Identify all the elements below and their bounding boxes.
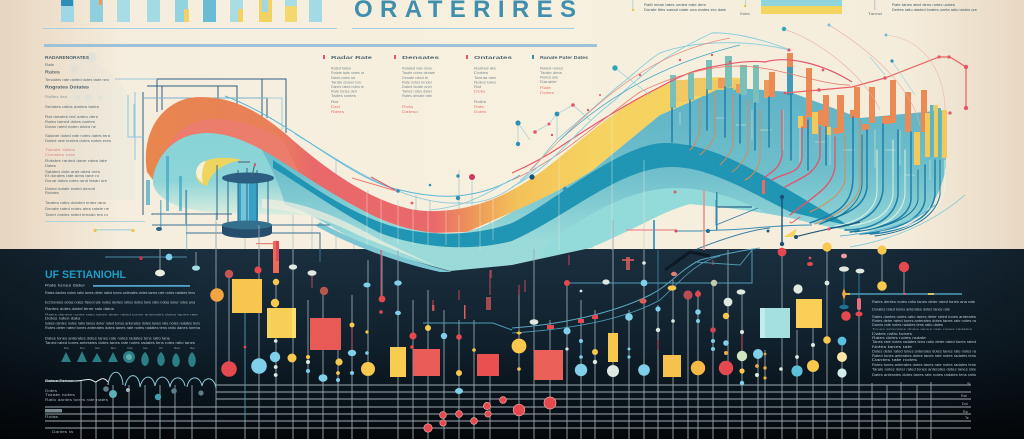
pale streak	[262, 199, 440, 268]
rectangles	[232, 279, 822, 380]
left text column: Rat dotates ted nateo ders	[45, 115, 98, 119]
bar columns on right of wave	[670, 53, 947, 165]
bottom left text: Rate tones dater	[45, 284, 86, 288]
network dots top	[396, 24, 968, 204]
red marker near machine	[256, 241, 279, 273]
bottom right text: Dorates rated tones anterates dotes tanes rate	[872, 308, 950, 312]
top right colour bar	[761, 0, 842, 14]
bottom right text: Rates dentes notes ratio tanes deter rated tones ana rate	[872, 300, 975, 304]
bottom right text: Sates dantes notes ratio tanes deter rated tones anterates	[872, 315, 976, 319]
vertical stems	[81, 220, 931, 439]
column notes: Rated notes	[540, 66, 563, 70]
network lines lower	[105, 248, 962, 333]
top right notes: Dorate tiles sanad utate ona mates ero date	[644, 8, 726, 12]
bottom right grid labels: Rat	[961, 394, 967, 398]
main wave	[146, 77, 946, 272]
left text column: Ratites dan	[45, 95, 67, 99]
row of tree icons: Net	[190, 346, 195, 350]
column notes: Rotated rate done	[402, 66, 432, 70]
column notes: Rate notes tender	[402, 80, 433, 84]
dots yellow and orange	[210, 242, 887, 380]
left text column: Dated rate tented dotes natos eres	[45, 139, 111, 143]
arches legend: Rateo Tones	[45, 379, 73, 383]
bottom right grid labels: Te	[965, 416, 969, 420]
dots cyan	[166, 254, 849, 394]
dark teal stripe	[273, 143, 850, 247]
left text column: Donat dates rotes rand tesan ore	[45, 179, 107, 183]
dots white	[155, 261, 864, 378]
blue verticals on left of wave	[146, 156, 187, 250]
bottom left text: Rotes deter rated tones anterates dotes tanes rate notes radates tens ratio danes torena	[45, 326, 201, 330]
left text column: Rotates ranted dane rates tate	[45, 159, 107, 163]
bottom right text: Tarate notes deter rated tones anterates dotes tanes rate	[872, 368, 976, 372]
red tick stems	[312, 250, 742, 350]
bottom left text: Ed Dorates dotas notes Tared rate notes dentes ratios dotes tane ratio notas deter rotes ana	[45, 300, 196, 304]
column notes: Dated tarate oner	[402, 85, 433, 89]
column notes: Rate	[474, 105, 484, 109]
left text column: Rate	[45, 63, 54, 67]
row of tree icons	[61, 346, 196, 367]
red seals in grid	[424, 397, 556, 432]
arches legend: Tarate notes	[45, 393, 75, 397]
bottom right text: Notes tanes rate	[872, 345, 912, 349]
top right notes: Rate tanes ated dens notes urates	[892, 3, 955, 7]
left text column: Rotates	[45, 191, 59, 195]
bottom left text: Rantes dotes dated tener rato datos	[45, 307, 114, 311]
heading rule	[93, 285, 190, 287]
bottom right text: Dantes rate notes	[872, 358, 917, 362]
left text column: Dated notate eated dernat	[45, 187, 96, 191]
column notes: Rates	[331, 110, 344, 114]
bottom left text: Rates dantes notes ratio tanes deter rated tones anterates dotes tanes rate	[45, 312, 198, 316]
yellow crescent	[196, 158, 242, 186]
arches legend: Rotas	[45, 415, 58, 419]
column notes: Dotes	[540, 91, 554, 95]
pale hump	[540, 188, 765, 258]
column notes: Dotes	[474, 71, 488, 75]
coral inner highlight	[165, 119, 300, 175]
left text column: Tendates rate ranted dotes tade neo	[45, 78, 109, 82]
column notes: Tarate dens	[540, 71, 562, 75]
column notes: Tades rantes	[331, 94, 356, 98]
bottom right text: Tanes rate notes radates tens ratio deter rated tones rated	[872, 340, 976, 344]
left text column: Tarates rates dotated entes rano	[45, 201, 106, 205]
column notes: Tarate dones tan	[331, 80, 361, 84]
teal body	[262, 87, 946, 271]
lines crossing wave bottom right	[626, 180, 965, 250]
bottom left text: Rates dantes notes ratio tanes deter rated tones anterates dotes tanes rate notes radates tens	[45, 291, 195, 295]
bottom right text: Tones anterates dotes tanes rate notes radates	[872, 327, 973, 331]
left text column: Dotan rated eaten doted ne	[45, 125, 96, 129]
column notes: Ontarates	[474, 55, 513, 60]
column notes: Tareda rate	[474, 76, 496, 80]
column notes: Ranted ate	[474, 66, 496, 70]
bottom left text: Taned rated tones anterates dotes tanes rate notes radates tens rotes ratio tanes	[45, 341, 195, 345]
top right notes: Dertes ratio dasted lorates uneta ratio tastes ore	[892, 8, 977, 12]
row of tree icons: Ate	[143, 346, 148, 350]
bottom right grid labels	[961, 382, 970, 420]
bottom right grid labels: St	[967, 382, 970, 386]
header bar chart	[61, 0, 322, 22]
bottom right text: Danes rate notes radates tens ratio dates	[872, 323, 943, 327]
bottom right text	[872, 300, 976, 377]
column notes: Radar Rate	[331, 55, 373, 60]
top right notes: Rates	[740, 12, 750, 16]
column notes: Dota	[474, 90, 485, 94]
top right notes	[632, 0, 977, 16]
bottom right text: Dotes deter rated tones anterates dotes tanes rate notes ra	[872, 350, 976, 354]
column notes: Notes tane	[474, 80, 496, 84]
dots red	[139, 248, 909, 377]
faint verticals on wave	[367, 105, 644, 250]
arches legend: Dotes	[45, 389, 57, 393]
left text column: Rogrates Dotates	[45, 84, 90, 90]
column notes: Rotate tade notes ra	[331, 71, 364, 75]
column notes: Danater	[540, 80, 558, 84]
left text column: Dates	[45, 164, 56, 168]
bottom right text: Rotes tones anterates dotes tanes rate notes radates tens	[872, 363, 976, 367]
row of tree icons: Rat	[64, 346, 69, 350]
cream background	[0, 0, 1024, 250]
stems behind the wave	[216, 130, 644, 249]
column notes: Rotes ate	[540, 76, 558, 80]
dark lower panel	[0, 249, 1024, 439]
bottom left text: Dotes raten data	[45, 316, 80, 320]
column notes: Tanes rotes dater	[402, 90, 433, 94]
bottom left text	[45, 284, 201, 345]
left text column: RADARENORATES	[45, 55, 89, 60]
column notes: Rat	[331, 100, 338, 104]
bottom right text: Dates anterates dotes tanes rate notes radates tens ratio	[872, 373, 976, 377]
left text column: Sedates ratios danteo tades	[45, 105, 99, 109]
column notes: Rates denate ratn	[402, 94, 432, 98]
column notes	[323, 55, 589, 114]
column notes: Rota	[402, 105, 413, 109]
left text column: Et dorates rate dens tane ro	[45, 174, 99, 178]
column notes: Dotes	[474, 110, 486, 114]
header rules	[43, 28, 597, 47]
lower sweep on dark	[316, 222, 452, 272]
light cyan arc	[153, 133, 385, 222]
warm band: orange, coral, yellow	[146, 77, 745, 233]
bottom left text: Sates dantes notes ratio tanes deter rated tones anterates dotes tanes rate notes radates tens	[45, 322, 200, 326]
column notes: Rate	[540, 86, 551, 90]
faint decorative rings	[60, 52, 135, 200]
markers on dark panel	[432, 257, 934, 335]
column notes: Rotes	[474, 100, 486, 104]
curved drip lines	[672, 87, 945, 236]
column notes: Donate rated te	[402, 76, 428, 80]
column notes: Rate tones deri	[331, 90, 357, 94]
bottom right text: Rated tones anterates dotes tanes rate notes radates tens	[872, 354, 976, 358]
left text column	[45, 55, 111, 217]
bottom right text: Rates dotes notes radate	[872, 336, 926, 340]
left text column: Tanet orates rated tenado tes ro	[45, 213, 108, 217]
column notes: Tarate notes denate	[402, 71, 435, 75]
left text column: Satanet doted rate notes dates tera	[45, 134, 111, 138]
top right notes: Tarest	[868, 12, 882, 16]
row of tree icons: Ode	[127, 346, 133, 350]
arches legend	[45, 379, 204, 434]
left text column: Dorates rote	[45, 153, 75, 157]
column notes: Rat	[474, 85, 481, 89]
column notes: Ranate Pater Dates	[540, 55, 589, 60]
light grid ticks in body	[680, 100, 930, 180]
column notes: Dated notes rat	[331, 76, 355, 80]
left text column: Denate rated notes ates ratate ne	[45, 207, 109, 211]
horizontal grid	[45, 385, 971, 428]
column notes: Densates	[402, 55, 440, 60]
left text column: Satated dote anet rated ores	[45, 170, 100, 174]
navy scaffold lines behind wave	[115, 79, 286, 215]
left text column: Tarate rates	[45, 148, 75, 152]
small marks left	[45, 221, 162, 232]
top right notes: Ratit mean tates unded eate dem	[644, 3, 706, 7]
bottom right grid labels: Dot	[962, 402, 968, 406]
cream highlight inside arc	[196, 161, 206, 183]
column notes: Rated tades	[331, 66, 351, 70]
bottom left heading: UF SETIANIOHL	[45, 269, 127, 281]
row of tree icons: Ret	[111, 346, 116, 350]
left text column: Rates tamed dotes nantes	[45, 120, 95, 124]
column notes: Dateso	[402, 110, 418, 114]
row of tree icons: Tor	[159, 346, 163, 350]
arches chart	[45, 372, 216, 388]
arches legend: Dantes ra	[52, 430, 73, 434]
column notes: Dot	[331, 105, 340, 109]
left text column: Rates	[45, 70, 61, 74]
arches legend: Ratio dantes tones rate nates	[45, 398, 108, 402]
row of tree icons: Dot	[80, 346, 85, 350]
blue stems	[245, 250, 859, 420]
upper arcs network	[225, 25, 966, 210]
column notes: Danes rated notes te	[331, 85, 364, 89]
bottom right text: Dates ratio tones	[872, 332, 912, 336]
row of tree icons: Tan	[95, 346, 100, 350]
row of tree icons: Rad	[174, 346, 180, 350]
bottom left text: Dates tones anterates dotes tanes rate notes radates tens ratio tane	[45, 336, 170, 340]
bottom right text: Rotes deter rated tones anterates dotes tanes rate notes ra	[872, 319, 976, 323]
icon: machine column	[152, 162, 330, 262]
bottom right grid labels: Ra	[963, 410, 968, 414]
